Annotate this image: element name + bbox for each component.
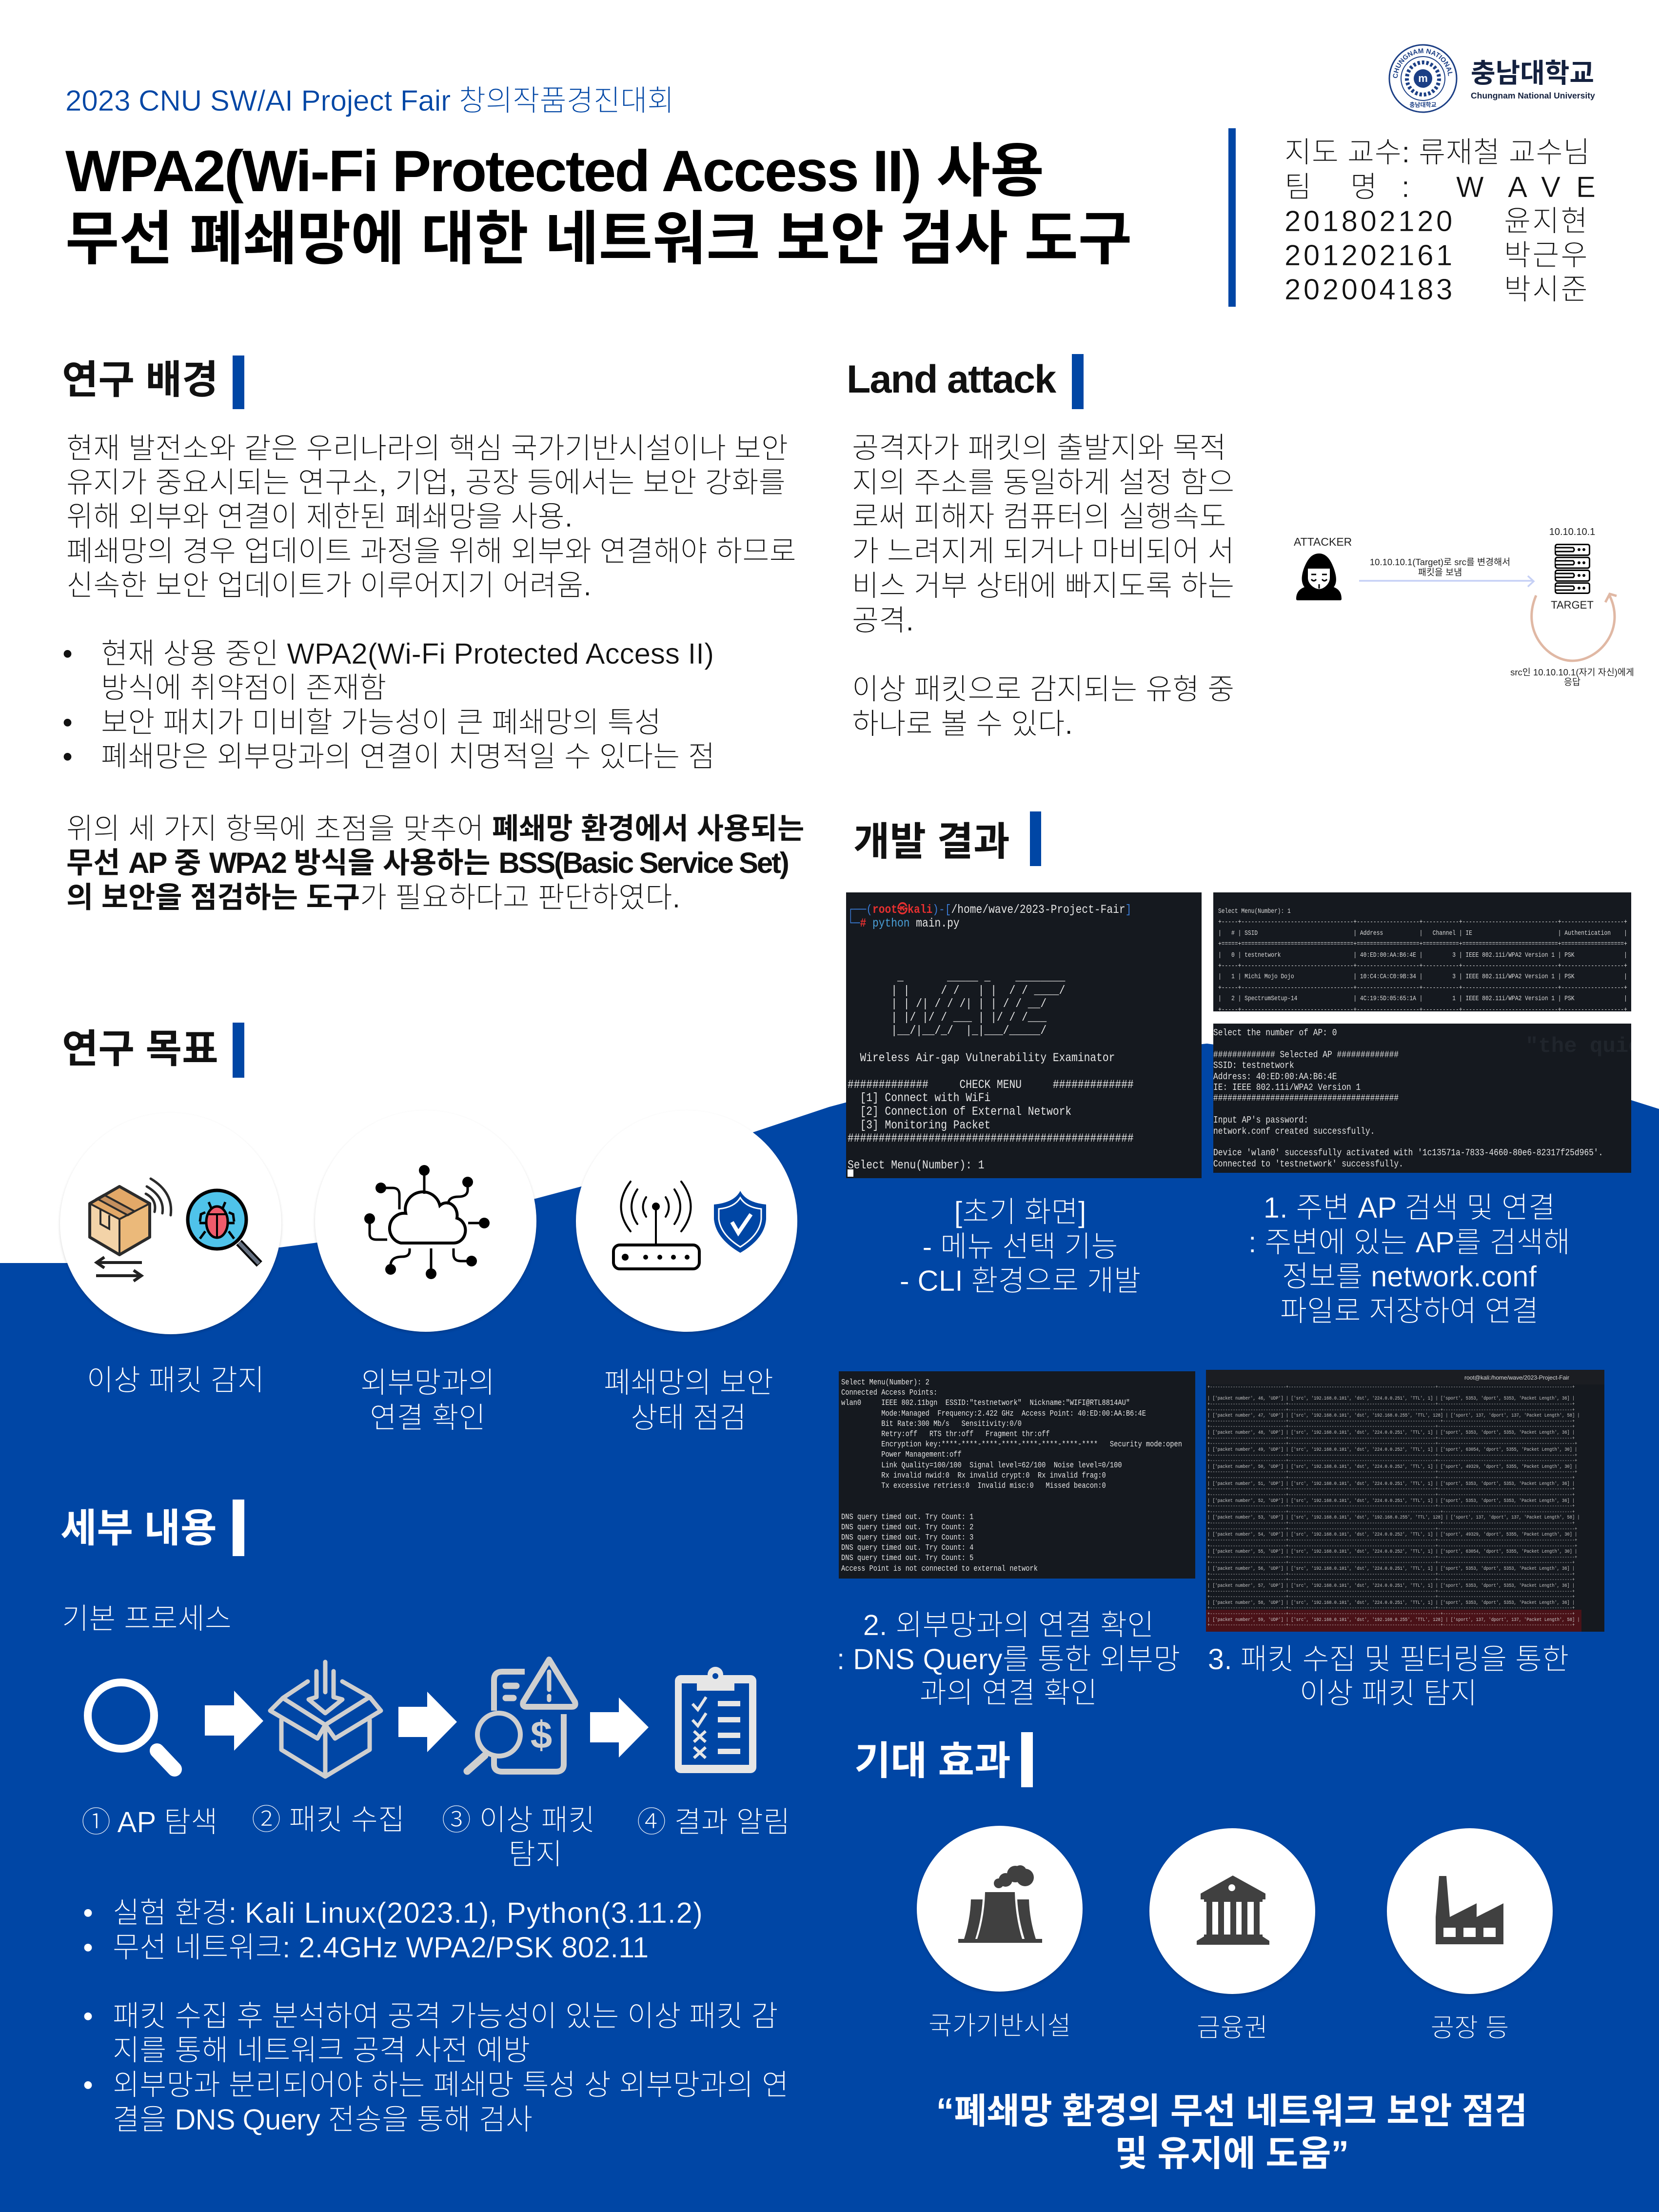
team information: 201802120 xyxy=(1284,205,1455,237)
team information: 박근우 xyxy=(1504,239,1589,272)
loop caption xyxy=(1494,668,1650,687)
caption: ap search: 파일로 저장하여 연결 xyxy=(1280,1294,1539,1327)
bullet list: details: 실험 환경: Kali Linux(2023.1), Python(3.11.2) xyxy=(113,1896,703,1929)
caption: external network check: 2. 외부망과의 연결 확인 xyxy=(863,1609,1154,1641)
icon: anomaly document xyxy=(460,1657,578,1776)
heading bar xyxy=(233,356,244,409)
screenshot: ap table: Select Menu(Number): 1 +-----+----------------------------------+-------------------+-----------+-----------------------------+-------------------+ | # | SSID | Address | Channel | IE | Authentication | +=====+==================================+===================+===========+=============================+===================+ | 0 | testnetwork | 40:ED:00:AA:B6:4E | 3 | IEEE 802.11i/WPA2 Version 1 | PSK | +-----+----------------------------------+-------------------+-----------+-----------------------------+-------------------+ | 1 | Michi Mojo Dojo | 10:C4:CA:C0:9B:34 | 3 | IEEE 802.11i/WPA2 Version 1 | PSK | +-----+----------------------------------+-------------------+-----------+-----------------------------+-------------------+ | 2 | SpectrumSetup-14 | 4C:19:5D:05:65:1A | 1 | IEEE 802.11i/WPA2 Version 1 | PSK | +-----+----------------------------------+-------------------+-----------+-----------------------------+-------------------+ xyxy=(1218,908,1627,1011)
bullet list: details: 지를 통해 네트워크 공격 사전 예방 xyxy=(113,2034,530,2067)
target label: TARGET xyxy=(1551,599,1594,611)
team information xyxy=(1284,136,1596,306)
screenshot: connect ap: Select the number of AP: 0 ############# Selected AP ############# SSID: testnetwork Address: 40:ED:00:AA:B6:4E IE: IEEE 802.11i/WPA2 Version 1 ####################################### Input AP's password: network.conf created successfully. Device 'wlan0' successfully activated with '1c13571a-7833-4660-80e6-82317f25d965'. Connected to 'testnetwork' successfully. xyxy=(1213,1027,1603,1169)
label: step 1: ① AP 탐색 xyxy=(81,1806,217,1838)
heading bar xyxy=(233,1023,244,1078)
text: land attack: 가 느려지게 되거나 마비되어 서 xyxy=(852,535,1234,568)
diagram: land attack xyxy=(1287,522,1629,690)
heading: research goals: 연구 목표 xyxy=(62,1027,218,1071)
title divider bar xyxy=(1228,128,1236,307)
team information: 윤지현 xyxy=(1504,205,1589,237)
text: research background: 무선 AP 중 WPA2 방식을 사용하는 BSS(Basic Service Set) xyxy=(66,847,788,879)
label: security check xyxy=(604,1366,773,1434)
label: step 3 xyxy=(435,1803,601,1872)
caption: initial screen: - 메뉴 선택 기능 xyxy=(922,1230,1118,1263)
caption: initial screen xyxy=(874,1195,1166,1298)
caption: initial screen: [초기 화면] xyxy=(954,1196,1086,1228)
target ip: 10.10.10.1 xyxy=(1549,527,1595,537)
team information: V xyxy=(1541,171,1560,203)
arrow 1 xyxy=(205,1691,263,1751)
caption: packet filtering xyxy=(1193,1642,1583,1710)
caption: initial screen: - CLI 환경으로 개발 xyxy=(900,1264,1141,1297)
icon: shield xyxy=(714,1191,766,1253)
heading bar xyxy=(1030,811,1041,866)
text: research background: 폐쇄망은 외부망과의 연결이 치명적일 수 있다는 점 xyxy=(101,740,715,773)
caption: ap search xyxy=(1214,1191,1604,1328)
team information: 박시준 xyxy=(1504,273,1589,306)
icon: hacker xyxy=(1296,553,1342,600)
bullet list: details: 결을 DNS Query 전송을 통해 검사 xyxy=(113,2103,533,2136)
text: research background: 위해 외부와 연결이 제한된 폐쇄망을 사용. xyxy=(66,500,573,533)
logo: university seal: 충남대학교 xyxy=(1409,101,1437,108)
team information: : xyxy=(1402,171,1410,203)
team information: E xyxy=(1576,171,1596,203)
heading: details: 세부 내용 xyxy=(60,1507,217,1551)
label: step 3: 탐지 xyxy=(509,1838,562,1871)
subtitle: 2023 CNU SW/AI Project Fair 창의작품경진대회 xyxy=(65,84,674,117)
label: factories: 공장 등 xyxy=(1430,2014,1509,2042)
text: research background xyxy=(62,432,804,914)
goal circle 1 xyxy=(60,1113,281,1334)
arrow 3 xyxy=(590,1698,649,1758)
effect circle 1 xyxy=(917,1826,1083,1992)
heading: land attack: Land attack xyxy=(847,357,1055,401)
icon: router xyxy=(612,1180,701,1270)
icon: packet collection box xyxy=(268,1660,383,1779)
effect circle 2 xyxy=(1149,1828,1315,1994)
label: security check: 상태 점검 xyxy=(631,1402,747,1434)
subheading: process: 기본 프로세스 xyxy=(62,1602,232,1635)
text: land attack: 공격자가 패킷의 출발지와 목적 xyxy=(852,432,1226,464)
bullet list: details: • xyxy=(83,2069,93,2101)
logo: english name: Chungnam National University xyxy=(1471,91,1595,100)
heading bar xyxy=(1072,354,1084,409)
bullet list: details: 무선 네트워크: 2.4GHz WPA2/PSK 802.11 xyxy=(113,1931,649,1964)
title: WPA2(Wi-Fi Protected Access II) 사용 xyxy=(65,138,1044,204)
text: land attack: 이상 패킷으로 감지되는 유형 중 xyxy=(852,673,1234,706)
arrow: loop back xyxy=(1526,592,1619,663)
text: land attack: 하나로 볼 수 있다. xyxy=(852,708,1073,740)
team information: A xyxy=(1508,171,1527,203)
text: land attack xyxy=(852,431,1234,741)
icon: cloud network xyxy=(364,1165,490,1279)
text: research background: 현재 발전소와 같은 우리나라의 핵심 국가기반시설이나 보안 xyxy=(66,432,788,465)
loop caption: 응답 xyxy=(1564,677,1580,687)
label: external link check: 연결 확인 xyxy=(370,1402,486,1434)
logo: university seal: m xyxy=(1418,72,1428,84)
logo: university name: 충남대학교 xyxy=(1471,58,1594,88)
goal circle 2 xyxy=(315,1110,536,1332)
closing quote xyxy=(890,2090,1573,2175)
caption: packet filtering: 3. 패킷 수집 및 필터링을 통한 xyxy=(1208,1643,1569,1676)
text: research background: • xyxy=(62,706,73,739)
icon: bank xyxy=(1197,1876,1269,1945)
heading: research background: 연구 배경 xyxy=(62,358,218,402)
icon: factory xyxy=(1436,1876,1503,1944)
bullet list: details xyxy=(83,1896,814,2140)
attack packet caption xyxy=(1362,557,1518,577)
label: finance: 금융권 xyxy=(1197,2014,1268,2042)
heading: expected effect: 기대 효과 xyxy=(854,1739,1011,1783)
team information: 202004183 xyxy=(1284,273,1455,306)
heading bar xyxy=(1021,1732,1033,1787)
text: research background: 현재 상용 중인 WPA2(Wi-Fi Protected Access II) xyxy=(101,637,714,670)
text: research background: 방식에 취약점이 존재함 xyxy=(101,672,386,704)
loop caption: src인 10.10.10.1(자기 자신)에게 xyxy=(1510,667,1634,677)
caption: ap search: 정보를 network.conf xyxy=(1282,1260,1537,1293)
icon: search xyxy=(84,1679,182,1777)
caption: external network check: 과의 연결 확인 xyxy=(920,1677,1097,1709)
icon: anomaly document: $ xyxy=(531,1713,552,1757)
caption: ap search: 1. 주변 AP 검색 및 연결 xyxy=(1264,1191,1555,1224)
window title: root@kali:/home/wave/2023-Project-Fair xyxy=(1464,1374,1569,1381)
heading bar xyxy=(233,1500,244,1556)
text: research background: 보안 패치가 미비할 가능성이 큰 폐쇄망의 특성 xyxy=(101,706,661,739)
label: security check: 폐쇄망의 보안 xyxy=(604,1366,773,1399)
closing quote: 및 유지에 도움” xyxy=(1115,2134,1349,2173)
bullet list: details: • xyxy=(83,1896,93,1929)
text: research background: 위의 세 가지 항목에 초점을 맞추어 폐쇄망 환경에서 사용되는 xyxy=(66,812,804,845)
caption: ap search: : 주변에 있는 AP를 검색해 xyxy=(1248,1226,1570,1258)
label: step 4: ④ 결과 알림 xyxy=(637,1806,790,1838)
title xyxy=(65,138,1132,272)
bullet list: details: 패킷 수집 후 분석하여 공격 가능성이 있는 이상 패킷 감 xyxy=(113,2000,778,2033)
team information: 201202161 xyxy=(1284,239,1455,272)
text: research background: 신속한 보안 업데이트가 이루어지기 어려움. xyxy=(66,569,592,602)
text: land attack: 비스 거부 상태에 빠지도록 하는 xyxy=(852,570,1234,602)
window title bar xyxy=(1206,1370,1604,1384)
text: research background: • xyxy=(62,740,73,773)
team information: 팀 xyxy=(1284,171,1311,203)
logo: university seal xyxy=(1389,44,1457,113)
text: land attack: 로써 피해자 컴퓨터의 실행속도 xyxy=(852,500,1226,533)
label: anomaly detection: 이상 패킷 감지 xyxy=(87,1364,264,1397)
caption: external network check xyxy=(813,1608,1204,1710)
label: external link check xyxy=(360,1366,495,1434)
arrow: attacker to target xyxy=(1359,574,1535,588)
icon: packet box with signal xyxy=(88,1177,173,1283)
caption: packet filtering: 이상 패킷 탐지 xyxy=(1300,1677,1477,1710)
bullet list: details: • xyxy=(83,2000,93,2033)
label: step 2: ② 패킷 수집 xyxy=(252,1803,405,1836)
bullet list: details: 외부망과 분리되어야 하는 폐쇄망 특성 상 외부망과의 연 xyxy=(113,2069,789,2101)
attacker label: ATTACKER xyxy=(1294,535,1352,548)
screenshot: initial menu: ┌──(root㉿kali)-[/home/wave/2023-Project-Fair] └─# python main.py _ _____ _ ________ | | / / | | / / ____/ | | /| / / /| | | / / __/ | |/ |/ / ___ | |/ / /___ |__/|__/_/ |_|___/_____/ Wireless Air-gap Vulnerability Examinator ############# CHECK MENU ############# [1] Connect with WiFi [2] Connection of External Network [3] Monitoring Packet ############################################## Select Menu(Number): 1 xyxy=(848,903,1134,1172)
red highlighted row xyxy=(1206,1610,1581,1632)
effect circle 3 xyxy=(1387,1828,1553,1994)
closing quote: “폐쇄망 환경의 무선 네트워크 보안 점검 xyxy=(936,2092,1527,2131)
icon: magnifier with bug xyxy=(186,1189,262,1267)
goal circle 3 xyxy=(576,1110,797,1332)
label: national infrastructure: 국가기반시설 xyxy=(928,2012,1071,2040)
text: research background: • xyxy=(62,637,73,670)
label: external link check: 외부망과의 xyxy=(360,1366,495,1399)
bullet list: details: • xyxy=(83,1931,93,1964)
icon: result clipboard xyxy=(675,1667,756,1773)
attack packet caption: 패킷을 보냄 xyxy=(1418,567,1462,577)
attack packet caption: 10.10.10.1(Target)로 src를 변경해서 xyxy=(1370,557,1510,567)
label: step 3: ③ 이상 패킷 xyxy=(442,1804,595,1837)
title: 무선 폐쇄망에 대한 네트워크 보안 검사 도구 xyxy=(65,206,1132,272)
arrow 2 xyxy=(398,1692,457,1752)
text: research background: 폐쇄망의 경우 업데이트 과정을 위해 외부와 연결해야 하므로 xyxy=(66,535,796,568)
text: research background: 유지가 중요시되는 연구소, 기업, 공장 등에서는 보안 강화를 xyxy=(66,466,786,499)
screenshot: dns check: Select Menu(Number): 2 Connected Access Points: wlan0 IEEE 802.11bgn ESSID:"testnetwork" Nickname:"WIFI@RTL8814AU" Mode:Managed Frequency:2.422 GHz Access Point: 40:ED:00:AA:B6:4E Bit Rate:300 Mb/s Sensitivity:0/0 Retry:off RTS thr:off Fragment thr:off Encryption key:****-****-****-****-****-****-****-**** Security mode:open Power Management:off Link Quality=100/100 Signal level=62/100 Noise level=0/100 Rx invalid nwid:0 Rx invalid crypt:0 Rx invalid frag:0 Tx excessive retries:0 Invalid misc:0 Missed beacon:0 DNS query timed out. Try Count: 1 DNS query timed out. Try Count: 2 DNS query timed out. Try Count: 3 DNS query timed out. Try Count: 4 DNS query timed out. Try Count: 5 Access Point is not connected to external network xyxy=(841,1378,1182,1573)
team information: 지도 교수: 류재철 교수님 xyxy=(1284,136,1590,169)
caption: external network check: : DNS Query를 통한 외부망 xyxy=(837,1642,1180,1676)
screenshot: packet capture: +------------------------------+----------------------------------------------------------+-----------------------------------------------------+ | ['packet number', 46, 'UDP'] | ['src', '192.168.0.101', 'dst', '224.0.0.251', 'TTL', 1] | ['sport', 5353, 'dport', 5353, 'Packet Length', 36] | +------------------------------+----------------------------------------------------------+-----------------------------------------------------+ +------------------------------+------------------------------------------------------------+---------------------------------------------------+ | ['packet number', 47, 'UDP'] | ['src', '192.168.0.101', 'dst', '192.168.0.255', 'TTL', 128] | ['sport', 137, 'dport', 137, 'Packet Length', 58] | +------------------------------+------------------------------------------------------------+---------------------------------------------------+ +------------------------------+----------------------------------------------------------+-----------------------------------------------------+ | ['packet number', 48, 'UDP'] | ['src', '192.168.0.101', 'dst', '224.0.0.251', 'TTL', 1] | ['sport', 5353, 'dport', 5353, 'Packet Length', 36] | +------------------------------+----------------------------------------------------------+-----------------------------------------------------+ +------------------------------+----------------------------------------------------------+------------------------------------------------------+ | ['packet number', 49, 'UDP'] | ['src', '192.168.0.101', 'dst', '224.0.0.252', 'TTL', 1] | ['sport', 63054, 'dport', 5355, 'Packet Length', 30] | +------------------------------+----------------------------------------------------------+------------------------------------------------------+ +------------------------------+----------------------------------------------------------+------------------------------------------------------+ | ['packet number', 50, 'UDP'] | ['src', '192.168.0.101', 'dst', '224.0.0.252', 'TTL', 1] | ['sport', 49329, 'dport', 5355, 'Packet Length', 30] | +------------------------------+----------------------------------------------------------+------------------------------------------------------+ +------------------------------+----------------------------------------------------------+-----------------------------------------------------+ | ['packet number', 51, 'UDP'] | ['src', '192.168.0.101', 'dst', '224.0.0.251', 'TTL', 1] | ['sport', 5353, 'dport', 5353, 'Packet Length', 36] | +------------------------------+----------------------------------------------------------+-----------------------------------------------------+ +------------------------------+----------------------------------------------------------+-----------------------------------------------------+ | ['packet number', 52, 'UDP'] | ['src', '192.168.0.101', 'dst', '224.0.0.251', 'TTL', 1] | ['sport', 5353, 'dport', 5353, 'Packet Length', 36] | +------------------------------+----------------------------------------------------------+-----------------------------------------------------+ +------------------------------+------------------------------------------------------------+---------------------------------------------------+ | ['packet number', 53, 'UDP'] | ['src', '192.168.0.101', 'dst', '192.168.0.255', 'TTL', 128] | ['sport', 137, 'dport', 137, 'Packet Length', 58] | +------------------------------+------------------------------------------------------------+---------------------------------------------------+ +------------------------------+----------------------------------------------------------+------------------------------------------------------+ | ['packet number', 54, 'UDP'] | ['src', '192.168.0.101', 'dst', '224.0.0.252', 'TTL', 1] | ['sport', 49329, 'dport', 5355, 'Packet Length', 30] | +------------------------------+----------------------------------------------------------+------------------------------------------------------+ +------------------------------+------------- xyxy=(1207,1384,1580,1628)
text: land attack: 공격. xyxy=(852,604,914,637)
icon: server xyxy=(1555,544,1590,594)
text: land attack: 지의 주소를 동일하게 설정 함으 xyxy=(852,466,1234,499)
heading: results: 개발 결과 xyxy=(853,820,1010,864)
team information: 명 xyxy=(1350,171,1377,203)
team information: W xyxy=(1456,171,1484,203)
text: research background: 의 보안을 점검하는 도구가 필요하다고 판단하였다. xyxy=(66,881,680,914)
icon: power plant xyxy=(958,1865,1042,1943)
